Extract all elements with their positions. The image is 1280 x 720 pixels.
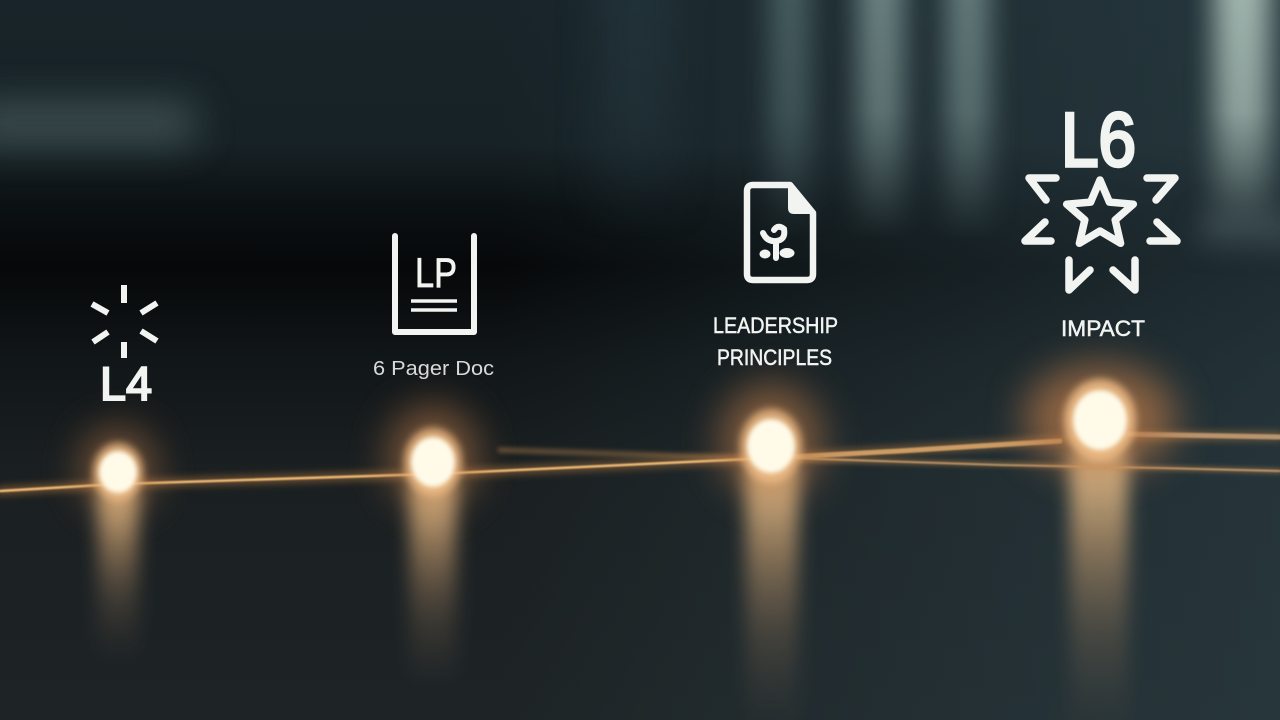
glowing node L6 impact — [1024, 364, 1176, 472]
label: impact: IMPACT — [1061, 316, 1145, 341]
icon: spark — [92, 285, 157, 358]
step: L6 impact — [1025, 98, 1177, 341]
timeline light line — [0, 434, 1280, 491]
glowing node 6 pager — [389, 406, 477, 506]
label: L6: L6 — [1061, 98, 1136, 183]
step: leadership principles — [713, 185, 838, 370]
step: 6 pager doc — [373, 236, 494, 380]
icon: document tray with LP: LP — [415, 249, 457, 296]
label: leadership principles — [713, 313, 838, 370]
light reflections on floor — [98, 446, 1128, 720]
glowing node leadership principles — [721, 384, 821, 496]
label: leadership principles: PRINCIPLES — [717, 345, 832, 370]
icon: document with tree glyph — [747, 185, 813, 280]
step: L4 — [92, 285, 157, 410]
label: 6 pager doc: 6 Pager Doc — [373, 358, 494, 380]
icon: document tray with LP — [395, 236, 474, 332]
icon: star with chevrons — [1025, 178, 1177, 290]
label: L4: L4 — [100, 357, 152, 410]
glowing node L4 — [82, 428, 154, 508]
label: leadership principles: LEADERSHIP — [713, 313, 838, 338]
